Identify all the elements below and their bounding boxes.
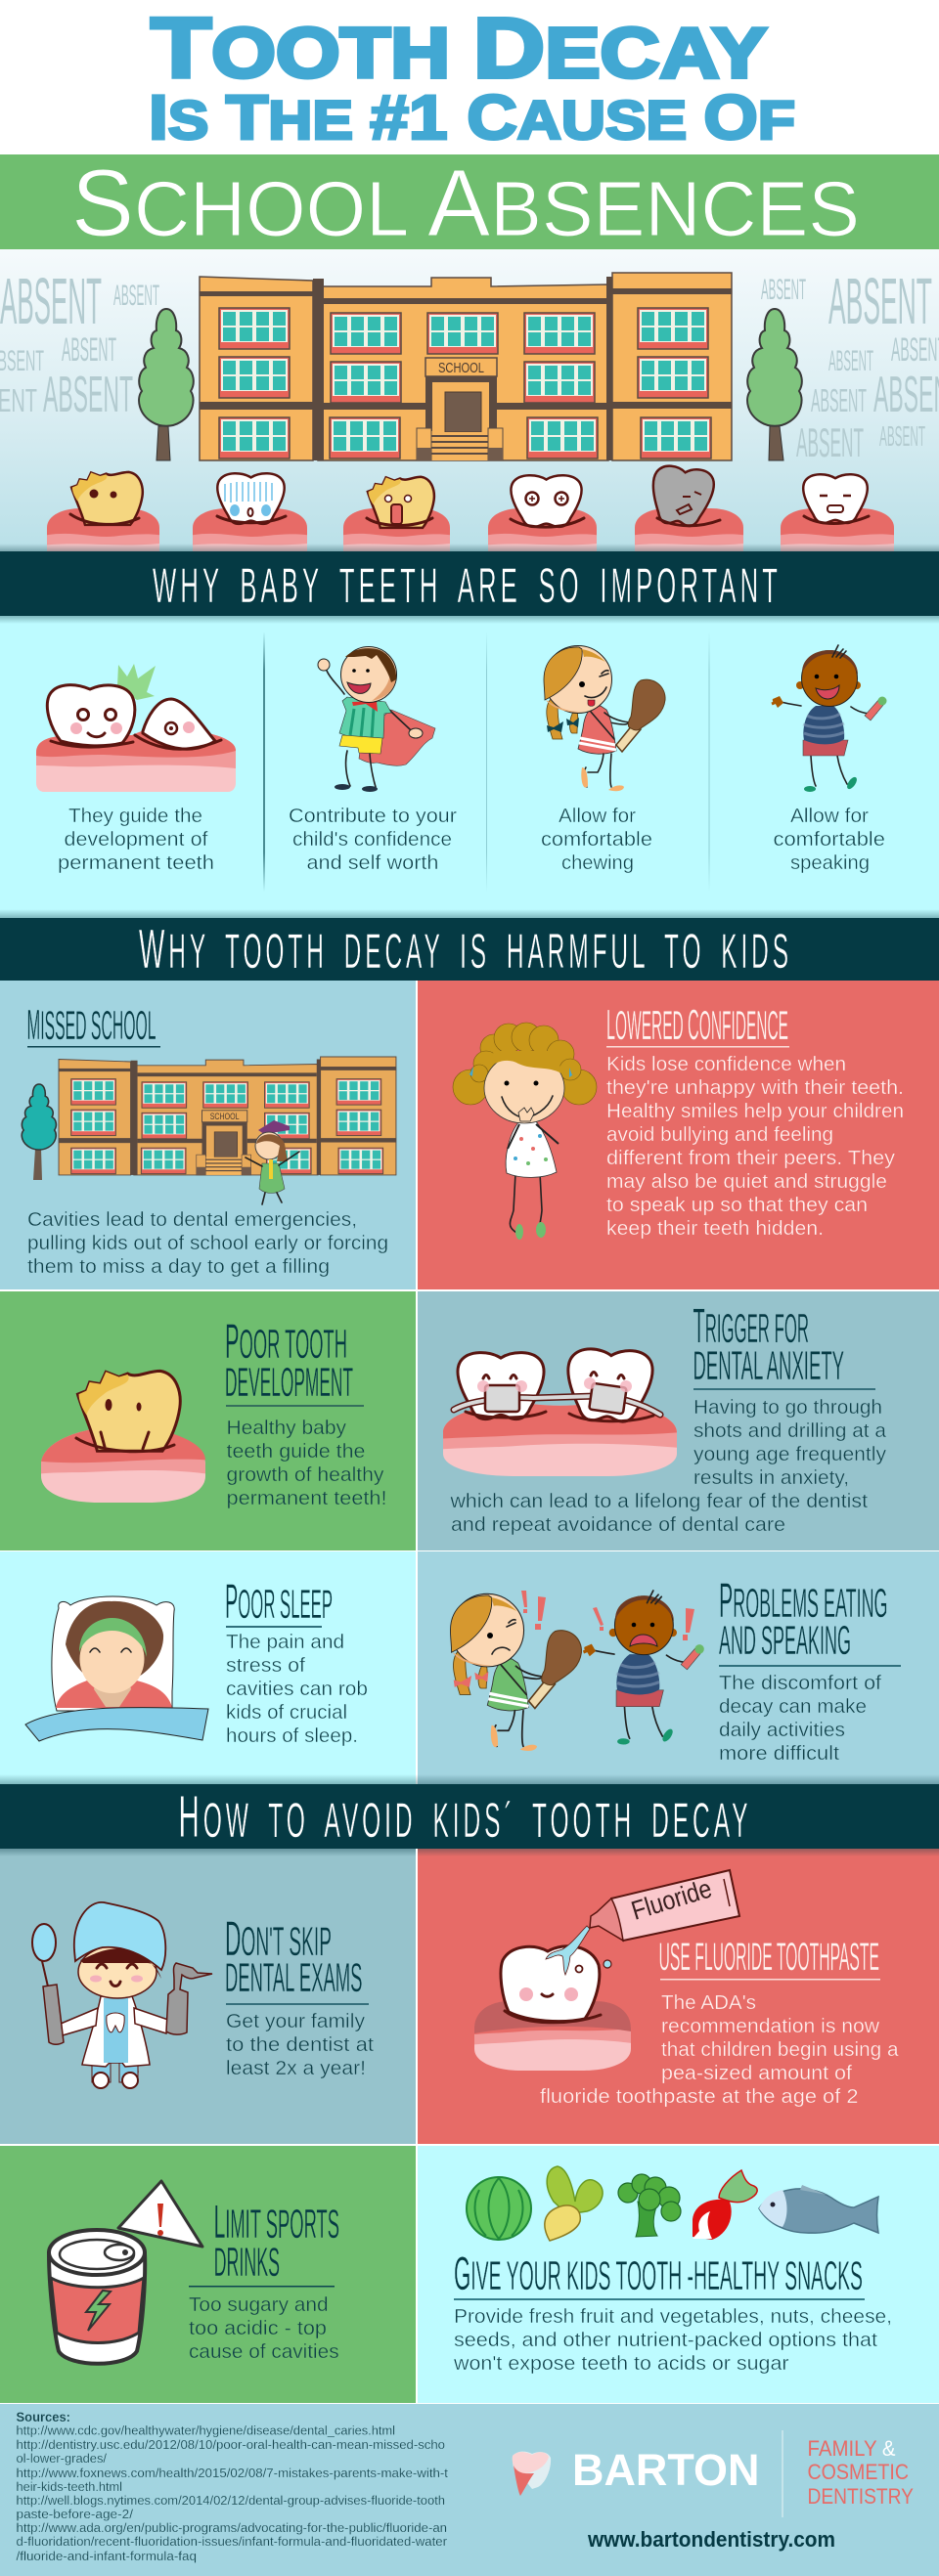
- body text: [719, 1673, 881, 1765]
- illustration: upset girl: [450, 1594, 581, 1751]
- illustration: boy with microphone: [772, 645, 886, 792]
- logo tagline: DENTISTRY: [808, 2484, 914, 2509]
- body text: seeds, and other nutrient-packed options that: [454, 2330, 877, 2351]
- tooth 6: [781, 474, 894, 551]
- body text: [606, 1054, 904, 1240]
- body text: teeth guide the: [227, 1441, 366, 1463]
- illustration: school and tree: [22, 1057, 396, 1180]
- exclamation marks: [521, 1591, 694, 1640]
- illustration: curly-haired girl: [453, 1023, 597, 1240]
- section band: why baby teeth are so important: [0, 551, 939, 616]
- caption: speaking: [773, 806, 885, 874]
- panel: poor tooth development: POOR TOOTH: [225, 1314, 347, 1369]
- body text: hours of sleep.: [226, 1725, 358, 1747]
- tooth 2: [193, 473, 307, 551]
- caption: chewing: [541, 806, 652, 874]
- hero illustration panel: [0, 249, 939, 551]
- heading: [225, 1314, 353, 1405]
- illustration: girl with drumstick: [544, 645, 665, 791]
- caption: speaking: Allow for: [790, 806, 869, 827]
- sources list: ol-lower-grades/: [16, 2451, 107, 2466]
- absent words left: ABSENT: [43, 367, 133, 423]
- sources list: http://www.cdc.gov/healthywater/hygiene/disease/dental_caries.html: [16, 2423, 395, 2438]
- body text: decay can make: [719, 1696, 867, 1718]
- body text: more difficult: [719, 1743, 839, 1765]
- body text: [227, 1418, 387, 1509]
- body text: Cavities lead to dental emergencies,: [27, 1209, 357, 1231]
- icon: right tree: [747, 309, 802, 460]
- section band: why tooth decay is harmful: [0, 918, 939, 981]
- caption: speaking: speaking: [790, 852, 870, 874]
- icon: broccoli: [618, 2174, 681, 2237]
- body text: too acidic - top: [189, 2318, 327, 2339]
- body text: which can lead to a lifelong fear of the dentist: [449, 1491, 868, 1512]
- body text: results in anxiety,: [693, 1467, 849, 1489]
- caption: confidence: [289, 806, 457, 874]
- illustration: sleeping child: [25, 1596, 208, 1741]
- heading: DON'T SKIP: [225, 1911, 332, 1966]
- panel: lowered confidence: [418, 981, 939, 1289]
- body text: Get your family: [226, 2011, 365, 2032]
- caption: speaking: comfortable: [773, 829, 885, 851]
- body text: cavities can rob: [226, 1679, 368, 1700]
- body text: Healthy baby: [227, 1418, 346, 1439]
- panel: poor sleep: [0, 1551, 416, 1784]
- caption: confidence: Contribute to your: [289, 806, 457, 827]
- sources list: Sources:: [16, 2409, 70, 2424]
- heading: [693, 1298, 844, 1388]
- title line 2: IS THE #1 C AUSE OF: [149, 82, 795, 153]
- school building: [200, 273, 732, 460]
- illustration: girl running to school: [246, 1120, 299, 1204]
- panel: why baby teeth matter: [0, 616, 939, 918]
- caption: chewing: Allow for: [559, 806, 636, 827]
- caption: guide development: They guide the: [68, 806, 202, 827]
- heading: [225, 1911, 362, 2000]
- body text: The ADA's: [661, 1992, 756, 2014]
- body text: stress of: [226, 1655, 305, 1677]
- body text: [449, 1397, 887, 1536]
- absent words left: ABSENT: [62, 331, 116, 369]
- panel: problems eating and speaking: [418, 1551, 939, 1784]
- absent words right: ABSENT: [811, 382, 867, 418]
- icon: cabbage: [467, 2177, 531, 2240]
- body text: that children begin using a: [661, 2039, 899, 2061]
- sources list: d-fluoridation/recent-fluoridation-issues/infant-formula-and-fluoridated-water: [16, 2534, 448, 2549]
- icon: left tree: [139, 309, 194, 460]
- logo tagline: FAMILY &: [808, 2436, 896, 2461]
- body text: pea-sized amount of: [661, 2063, 852, 2084]
- illustration: decayed tooth: [41, 1371, 205, 1503]
- body text: [27, 1209, 388, 1278]
- section band: how to avoid tooth decay: [0, 1774, 939, 1850]
- tooth 3: [343, 477, 450, 551]
- body text: they're unhappy with their teeth.: [606, 1077, 904, 1099]
- footer: [0, 2404, 939, 2576]
- body text: growth of healthy: [227, 1464, 383, 1486]
- caption: guide development: [58, 806, 214, 874]
- body text: them to miss a day to get a filling: [27, 1256, 330, 1278]
- body text: permanent teeth!: [227, 1488, 387, 1509]
- logo: barton tooth mark: [513, 2452, 551, 2496]
- caption: confidence: and self worth: [307, 852, 438, 874]
- logo tagline: [808, 2436, 914, 2509]
- banner text: SCHOOL ABSENCES: [71, 150, 860, 256]
- panel: poor tooth development: DEVELOPMENT: [225, 1359, 353, 1405]
- caption: guide development: permanent teeth: [58, 852, 214, 874]
- sources list: http://www.ada.org/en/public-programs/advocating-for-the-public/fluoride-an: [16, 2520, 447, 2535]
- absent words left: [0, 265, 159, 423]
- body text: may also be quiet and struggle: [606, 1171, 887, 1193]
- sources list: http://dentistry.usc.edu/2012/08/10/poor-oral-health-can-mean-missed-scho: [16, 2437, 445, 2452]
- website url: www.bartondentistry.com: [587, 2527, 835, 2552]
- body text: The pain and: [226, 1632, 344, 1653]
- body text: Too sugary and: [189, 2294, 329, 2316]
- body text: Having to go through: [693, 1397, 882, 1419]
- panel: limit sports drinks: [0, 2146, 416, 2403]
- body text: The discomfort of: [719, 1673, 881, 1694]
- illustration: boy in cape: [318, 647, 435, 792]
- illustration: dentist child: [32, 1902, 212, 2088]
- sources list: heir-kids-teeth.html: [16, 2479, 122, 2494]
- sources list: http://www.foxnews.com/health/2015/02/08/7-mistakes-parents-make-with-t: [16, 2466, 448, 2480]
- row of tooth characters: [47, 464, 894, 551]
- panel: fluoride toothpaste: [418, 1849, 939, 2144]
- body text: Provide fresh fruit and vegetables, nuts, cheese,: [454, 2306, 892, 2328]
- body text: Kids lose confidence when: [606, 1054, 846, 1075]
- logo tagline: COSMETIC: [808, 2460, 909, 2484]
- body text: and repeat avoidance of dental care: [451, 1514, 785, 1536]
- illustration: two smiling teeth on gum: [36, 664, 236, 792]
- body text: daily activities: [719, 1720, 845, 1741]
- panel: limit sports drinks: LIMIT SPORTS: [214, 2197, 339, 2249]
- body text: recommendation is now: [661, 2016, 880, 2037]
- body text: [226, 1632, 368, 1747]
- caption: chewing: comfortable: [541, 829, 652, 851]
- panel: poor tooth development: [0, 1291, 416, 1550]
- illustration: tooth and toothpaste tube: [474, 1870, 739, 2071]
- body text: Healthy smiles help your children: [606, 1101, 904, 1122]
- illustration: upset boy: [583, 1591, 704, 1744]
- body text: shots and drilling at a: [693, 1420, 887, 1442]
- tooth 5: [635, 464, 743, 551]
- sources list: paste-before-age-2/: [16, 2507, 133, 2521]
- body text: [540, 1992, 899, 2108]
- absent words left: ABSENT: [0, 265, 102, 338]
- body text: keep their teeth hidden.: [606, 1218, 824, 1240]
- panel: healthy snacks: [418, 2146, 939, 2403]
- icon: soda can: [49, 2230, 145, 2364]
- caption: chewing: chewing: [561, 852, 634, 874]
- body text: to speak up so that they can: [606, 1195, 868, 1216]
- heading: [214, 2197, 339, 2285]
- illustration: tooth and toothpaste tube: Fluoride: [628, 1873, 715, 1926]
- body text: won't expose teeth to acids or sugar: [453, 2353, 789, 2375]
- panel: dental exams: DENTAL EXAMS: [225, 1954, 362, 2000]
- body text: kids of crucial: [226, 1702, 347, 1724]
- sources list: /fluoride-and-infant-formula-faq: [16, 2549, 197, 2563]
- banner: school absences: [0, 150, 939, 256]
- caption: confidence: child's confidence: [292, 829, 452, 851]
- heading: DRINKS: [214, 2239, 280, 2285]
- icon: fish: [759, 2185, 878, 2233]
- body text: [189, 2294, 339, 2363]
- panel: dental exams: [0, 1849, 416, 2144]
- sources list: [16, 2409, 448, 2563]
- panel: missed school: MISSED SCHOOL: [27, 1001, 156, 1049]
- body text: least 2x a year!: [226, 2058, 366, 2079]
- icon: warning triangle: [118, 2181, 202, 2247]
- hero illustration panel: ABSENT: [113, 280, 159, 312]
- body text: fluoride toothpaste at the age of 2: [540, 2086, 859, 2108]
- body text: to the dentist at: [226, 2034, 374, 2056]
- sources list: http://well.blogs.nytimes.com/2014/02/12/dental-group-advises-fluoride-tooth: [16, 2493, 445, 2508]
- panel: missed school: [0, 981, 416, 1289]
- body text: [453, 2306, 892, 2375]
- icon: radish: [693, 2170, 757, 2240]
- panel: poor sleep: POOR SLEEP: [225, 1574, 333, 1629]
- absent words right: [761, 265, 939, 465]
- body text: pulling kids out of school early or forcing: [27, 1233, 388, 1254]
- tooth 1: [47, 472, 159, 551]
- illustration: teeth with braces: [443, 1348, 677, 1476]
- body text: young age frequently: [693, 1444, 886, 1465]
- body text: different from their peers. They: [606, 1148, 895, 1169]
- caption: guide development: development of: [65, 829, 208, 851]
- heading: LOWERED CONFIDENCE: [606, 1001, 788, 1049]
- logo wordmark: BARTON: [572, 2445, 759, 2495]
- heading: [719, 1573, 888, 1663]
- tooth 4: [488, 475, 597, 551]
- body text: cause of cavities: [189, 2341, 339, 2363]
- body text: [226, 2011, 374, 2079]
- header: title: [0, 0, 939, 154]
- body text: avoid bullying and feeling: [606, 1124, 833, 1146]
- icon: turnip: [545, 2166, 603, 2241]
- panel: trigger for dental anxiety: [418, 1291, 939, 1550]
- absent words right: ABSENT: [761, 274, 806, 306]
- title line 1: TOOTH DECAY: [151, 1, 767, 96]
